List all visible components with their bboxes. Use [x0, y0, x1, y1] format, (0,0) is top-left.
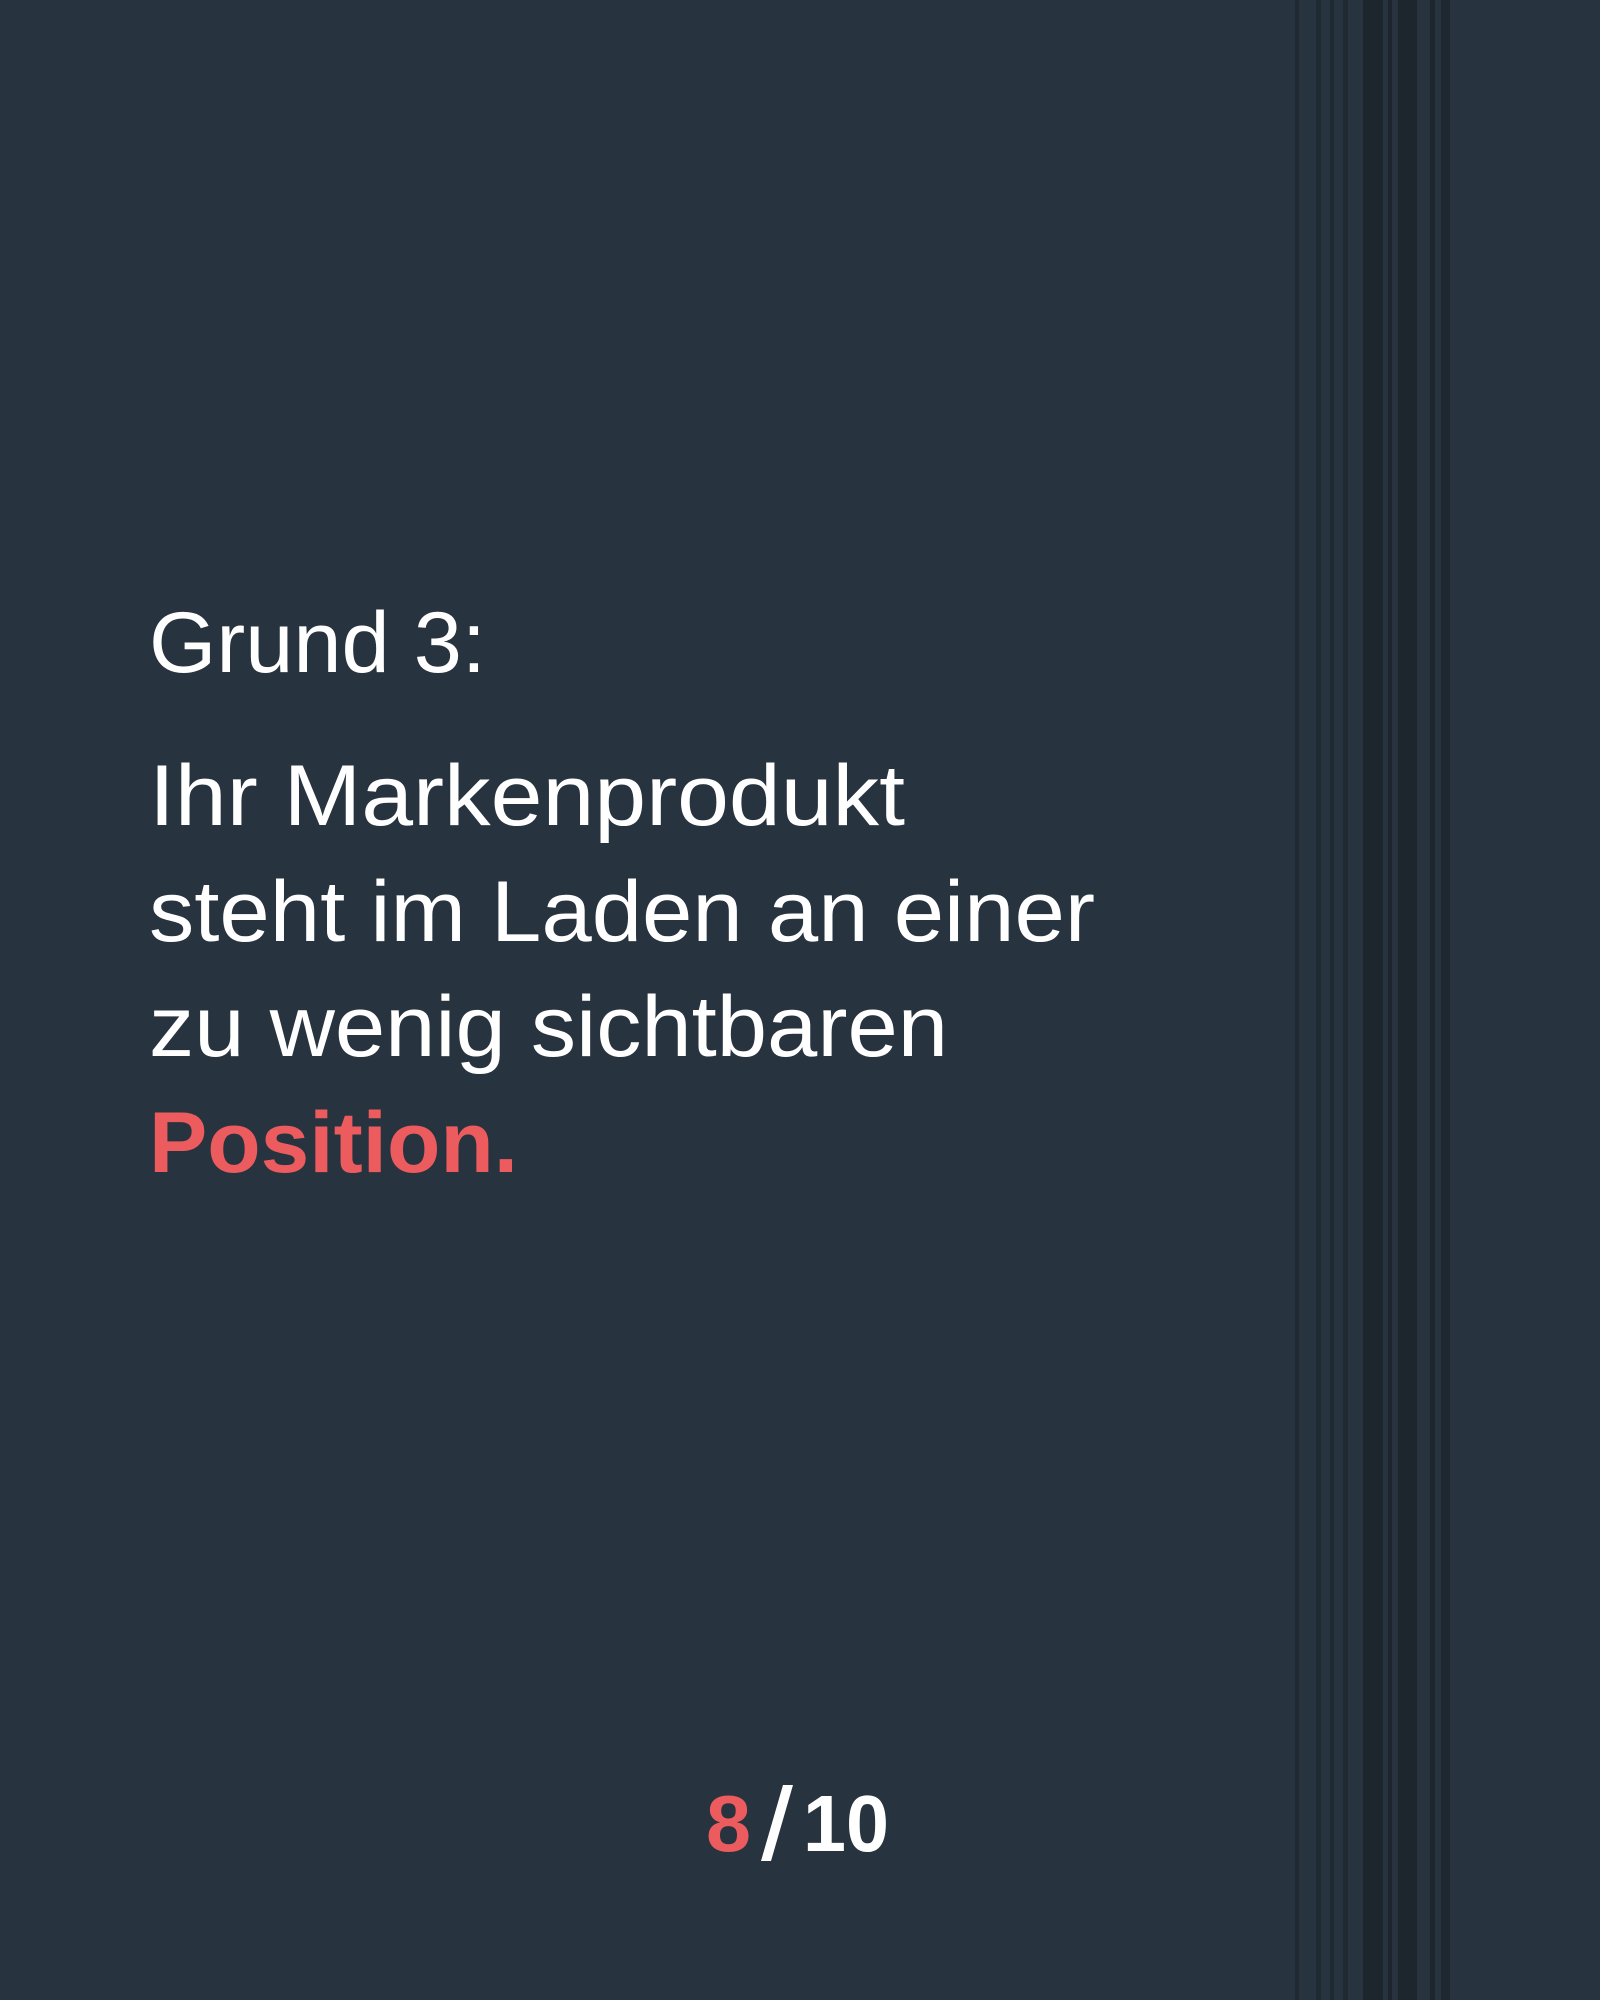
line 2: steht im Laden an einer: [149, 864, 1095, 960]
main statement: [149, 748, 1095, 1191]
line 1: Ihr Markenprodukt: [149, 748, 905, 844]
highlighted word: Position: Position.: [149, 1095, 518, 1191]
line 3: zu wenig sichtbaren: [149, 979, 948, 1075]
total page count: 10: [803, 1779, 889, 1868]
page counter: [706, 1779, 889, 1868]
decorative vertical stripes: [1295, 0, 1450, 2000]
heading: Grund 3: Grund 3:: [149, 595, 486, 691]
current page number: 8: [706, 1779, 751, 1868]
slash separator: [761, 1785, 793, 1861]
